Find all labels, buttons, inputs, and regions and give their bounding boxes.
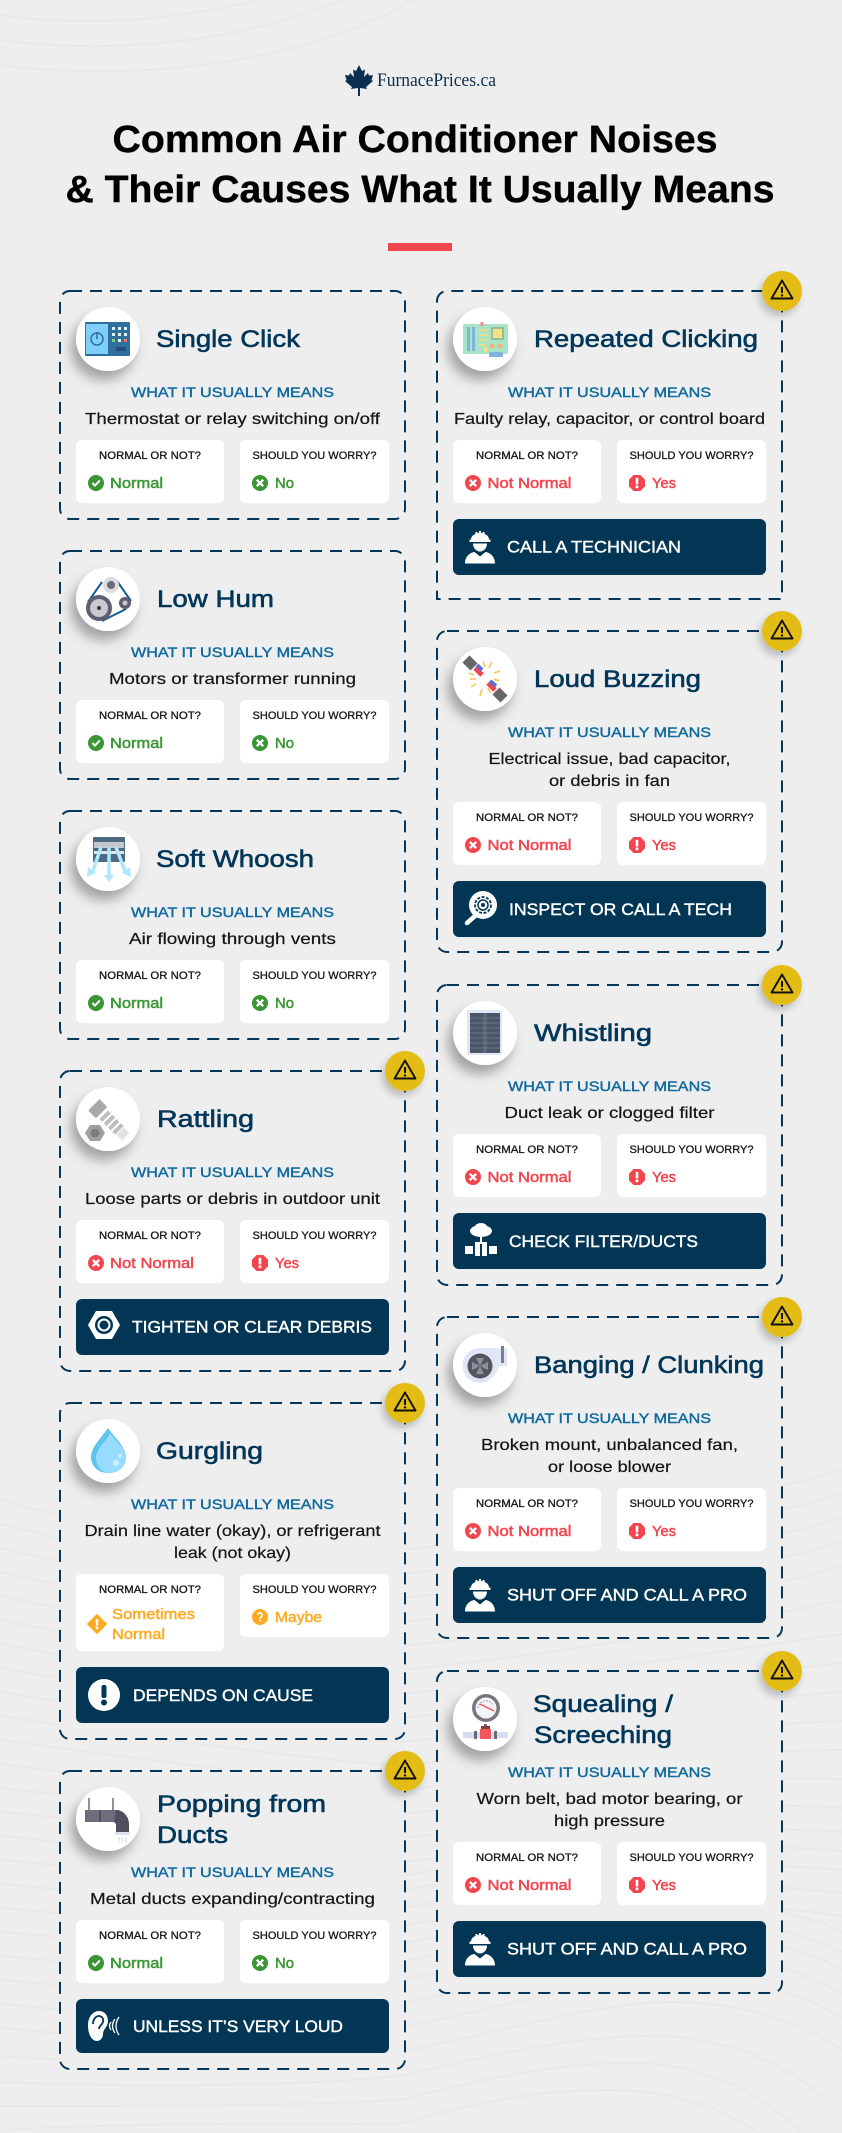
- icon: water drop: [76, 1419, 140, 1483]
- action button: [453, 881, 766, 937]
- panel: Banging / Clunking: [437, 1297, 802, 1638]
- subheading: WHAT IT USUALLY MEANS: [508, 1410, 711, 1426]
- normal or not card: Not Normal: [488, 1523, 572, 1540]
- action button: INSPECT OR CALL A TECH: [509, 901, 732, 919]
- panel: Gurgling: [60, 1383, 425, 1739]
- description: Thermostat or relay switching on/off: [85, 411, 381, 428]
- icon: belt and pulleys: [76, 567, 140, 631]
- action button: [76, 1667, 389, 1723]
- normal or not card: [76, 440, 224, 503]
- description: [84, 1523, 381, 1562]
- normal or not card: Not Normal: [110, 1255, 194, 1272]
- normal or not card: NORMAL OR NOT?: [99, 1930, 201, 1942]
- heading: Popping from: [157, 1791, 326, 1818]
- normal or not card: NORMAL OR NOT?: [476, 1498, 578, 1510]
- normal or not card: NORMAL OR NOT?: [476, 812, 578, 824]
- normal or not card: NORMAL OR NOT?: [99, 970, 201, 982]
- panel: Squealing / Screeching: [437, 1651, 802, 1993]
- logo: FurnacePrices.ca: [345, 65, 497, 96]
- subheading: WHAT IT USUALLY MEANS: [508, 1764, 711, 1780]
- normal or not card: [453, 1488, 601, 1551]
- panel: Popping from Ducts: [60, 1751, 425, 2069]
- description: Broken mount, unbalanced fan,: [481, 1437, 738, 1454]
- description: Loose parts or debris in outdoor unit: [85, 1191, 381, 1208]
- action button: DEPENDS ON CAUSE: [133, 1687, 313, 1705]
- normal or not card: NORMAL OR NOT?: [99, 710, 201, 722]
- panel: Rattling: [60, 1051, 425, 1371]
- action button: CALL A TECHNICIAN: [507, 538, 681, 556]
- should you worry card: Yes: [652, 837, 676, 854]
- warning badge: [762, 1297, 802, 1337]
- should you worry card: SHOULD YOU WORRY?: [252, 450, 376, 462]
- subheading: WHAT IT USUALLY MEANS: [508, 1078, 711, 1094]
- panel: Soft Whoosh: [60, 811, 405, 1039]
- description: Duct leak or clogged filter: [504, 1105, 715, 1122]
- warning badge: [762, 611, 802, 651]
- should you worry card: [240, 440, 389, 503]
- normal or not card: Not Normal: [488, 1169, 572, 1186]
- should you worry card: [240, 960, 389, 1023]
- heading: Soft Whoosh: [156, 846, 314, 873]
- normal or not card: [453, 440, 601, 503]
- warning badge: [762, 271, 802, 311]
- title: Common Air Conditioner Noises: [112, 119, 718, 161]
- normal or not card: [453, 802, 601, 865]
- description: [476, 1791, 743, 1830]
- heading: [533, 1691, 673, 1749]
- warning badge: [762, 965, 802, 1005]
- normal or not card: Sometimes: [112, 1606, 195, 1623]
- panel: Single Click: [60, 291, 405, 519]
- subheading: WHAT IT USUALLY MEANS: [131, 644, 334, 660]
- heading: Low Hum: [157, 586, 274, 613]
- normal or not card: [76, 960, 224, 1023]
- normal or not card: [76, 1920, 224, 1983]
- normal or not card: NORMAL OR NOT?: [476, 1144, 578, 1156]
- should you worry card: SHOULD YOU WORRY?: [252, 710, 376, 722]
- warning badge: [385, 1051, 425, 1091]
- heading: Ducts: [157, 1822, 228, 1849]
- should you worry card: [240, 1220, 389, 1283]
- normal or not card: [453, 1842, 601, 1905]
- should you worry card: Yes: [652, 1523, 676, 1540]
- panel: Whistling: [437, 965, 802, 1285]
- title: [66, 119, 774, 211]
- heading: Repeated Clicking: [534, 326, 758, 353]
- should you worry card: SHOULD YOU WORRY?: [252, 1930, 376, 1942]
- action button: [76, 1299, 389, 1355]
- description: Metal ducts expanding/contracting: [90, 1891, 375, 1908]
- heading: Single Click: [156, 326, 301, 353]
- action button: TIGHTEN OR CLEAR DEBRIS: [132, 1318, 372, 1336]
- subheading: WHAT IT USUALLY MEANS: [508, 724, 711, 740]
- icon: air filter: [453, 1001, 517, 1065]
- should you worry card: [617, 1842, 766, 1905]
- should you worry card: [617, 1134, 766, 1197]
- action button: [453, 1567, 766, 1623]
- subheading: WHAT IT USUALLY MEANS: [131, 1164, 334, 1180]
- description: [488, 751, 730, 790]
- should you worry card: Yes: [275, 1255, 299, 1272]
- should you worry card: SHOULD YOU WORRY?: [630, 1144, 754, 1156]
- action button: [453, 519, 766, 575]
- icon: duct elbow: [76, 1787, 140, 1851]
- heading: Gurgling: [156, 1438, 263, 1465]
- action button: [453, 1213, 766, 1269]
- description: Worn belt, bad motor bearing, or: [476, 1791, 743, 1808]
- normal or not card: NORMAL OR NOT?: [99, 450, 201, 462]
- panel: Repeated Clicking: [437, 271, 802, 599]
- warning badge: [385, 1751, 425, 1791]
- logo: FurnacePrices.ca: FurnacePrices.ca: [377, 70, 497, 91]
- heading: Whistling: [534, 1020, 652, 1047]
- icon: sparking wire: [453, 647, 517, 711]
- should you worry card: SHOULD YOU WORRY?: [630, 1852, 754, 1864]
- should you worry card: Yes: [652, 1877, 676, 1894]
- should you worry card: Yes: [652, 475, 676, 492]
- heading: Squealing /: [533, 1691, 673, 1718]
- subheading: WHAT IT USUALLY MEANS: [131, 384, 334, 400]
- icon: air vent: [76, 827, 140, 891]
- icon: circuit board: [453, 307, 517, 371]
- description: or loose blower: [548, 1459, 672, 1476]
- should you worry card: [240, 700, 389, 763]
- normal or not card: Not Normal: [488, 1877, 572, 1894]
- warning badge: [762, 1651, 802, 1691]
- description: Faulty relay, capacitor, or control board: [454, 411, 765, 428]
- action button: SHUT OFF AND CALL A PRO: [507, 1586, 747, 1604]
- normal or not card: NORMAL OR NOT?: [99, 1584, 201, 1596]
- icon: bolt and nut: [76, 1087, 140, 1151]
- title: & Their Causes What It Usually Means: [66, 169, 774, 211]
- should you worry card: [240, 1920, 389, 1983]
- normal or not card: NORMAL OR NOT?: [476, 1852, 578, 1864]
- red divider: [388, 243, 452, 251]
- heading: Loud Buzzing: [534, 666, 701, 693]
- should you worry card: SHOULD YOU WORRY?: [630, 450, 754, 462]
- description: high pressure: [554, 1813, 665, 1830]
- should you worry card: No: [275, 735, 294, 752]
- icon: thermostat: [76, 307, 140, 371]
- description: Motors or transformer running: [109, 671, 356, 688]
- description: Electrical issue, bad capacitor,: [488, 751, 730, 768]
- normal or not card: Normal: [110, 735, 163, 752]
- description: or debris in fan: [549, 773, 670, 790]
- heading: [157, 1791, 326, 1849]
- description: leak (not okay): [174, 1545, 291, 1562]
- icon: pressure gauge: [453, 1687, 517, 1751]
- action button: CHECK FILTER/DUCTS: [509, 1233, 698, 1251]
- normal or not card: Not Normal: [488, 837, 572, 854]
- should you worry card: [617, 1488, 766, 1551]
- subheading: WHAT IT USUALLY MEANS: [508, 384, 711, 400]
- should you worry card: Yes: [652, 1169, 676, 1186]
- should you worry card: No: [275, 1955, 294, 1972]
- normal or not card: Normal: [110, 995, 163, 1012]
- normal or not card: [453, 1134, 601, 1197]
- normal or not card: Normal: [110, 475, 163, 492]
- description: [481, 1437, 738, 1476]
- subheading: WHAT IT USUALLY MEANS: [131, 1864, 334, 1880]
- panel: Low Hum: [60, 551, 405, 779]
- should you worry card: No: [275, 475, 294, 492]
- heading: Rattling: [157, 1106, 254, 1133]
- action button: [453, 1921, 766, 1977]
- description: Drain line water (okay), or refrigerant: [84, 1523, 381, 1540]
- should you worry card: [240, 1574, 389, 1637]
- heading: Screeching: [534, 1722, 672, 1749]
- heading: Banging / Clunking: [534, 1352, 764, 1379]
- normal or not card: [76, 1220, 224, 1283]
- normal or not card: NORMAL OR NOT?: [99, 1230, 201, 1242]
- action button: UNLESS IT’S VERY LOUD: [133, 2018, 343, 2036]
- should you worry card: Maybe: [275, 1609, 322, 1626]
- description: Air flowing through vents: [129, 931, 336, 948]
- should you worry card: [617, 440, 766, 503]
- warning badge: [385, 1383, 425, 1423]
- should you worry card: [617, 802, 766, 865]
- normal or not card: Normal: [112, 1626, 165, 1643]
- normal or not card: Not Normal: [488, 475, 572, 492]
- should you worry card: SHOULD YOU WORRY?: [630, 812, 754, 824]
- normal or not card: [76, 1574, 224, 1651]
- normal or not card: Normal: [110, 1955, 163, 1972]
- should you worry card: SHOULD YOU WORRY?: [252, 970, 376, 982]
- subheading: WHAT IT USUALLY MEANS: [131, 904, 334, 920]
- should you worry card: SHOULD YOU WORRY?: [252, 1584, 376, 1596]
- panel: Loud Buzzing: [437, 611, 802, 952]
- should you worry card: SHOULD YOU WORRY?: [252, 1230, 376, 1242]
- action button: [76, 1999, 389, 2053]
- subheading: WHAT IT USUALLY MEANS: [131, 1496, 334, 1512]
- should you worry card: No: [275, 995, 294, 1012]
- action button: SHUT OFF AND CALL A PRO: [507, 1940, 747, 1958]
- icon: blower fan: [453, 1333, 517, 1397]
- should you worry card: SHOULD YOU WORRY?: [630, 1498, 754, 1510]
- normal or not card: NORMAL OR NOT?: [476, 450, 578, 462]
- normal or not card: [76, 700, 224, 763]
